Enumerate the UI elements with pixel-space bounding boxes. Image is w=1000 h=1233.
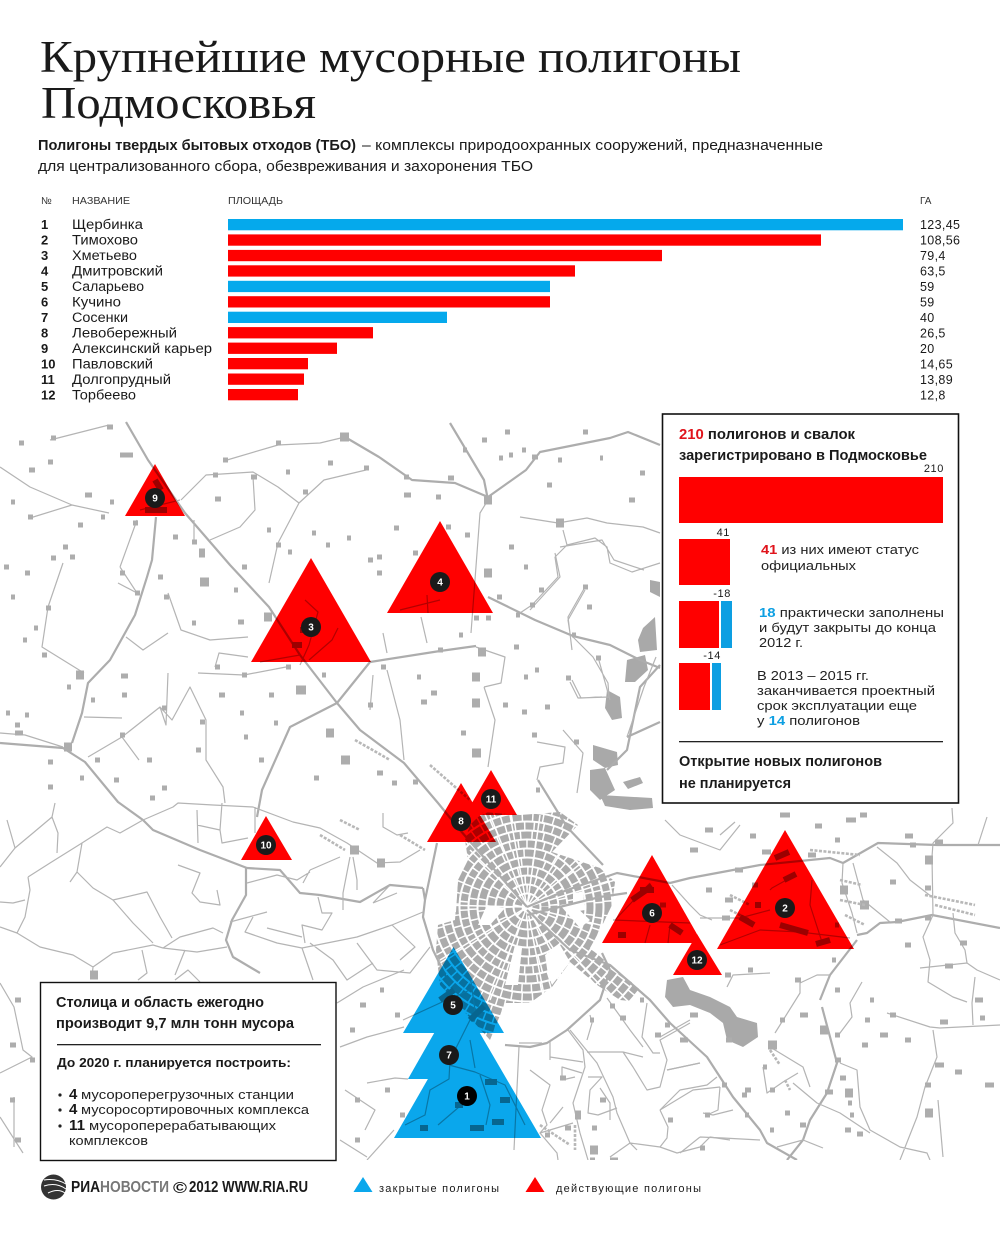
bar chart: landfill areas: 12	[41, 388, 55, 402]
bar chart: landfill areas: 3	[41, 248, 48, 263]
bar chart: landfill areas: Тимохово	[72, 232, 138, 248]
title	[40, 32, 741, 128]
bar chart: landfill areas: Сосенки	[72, 310, 128, 325]
bar 18	[679, 588, 732, 648]
bar chart: landfill areas: 10	[41, 356, 55, 372]
bar chart: landfill areas: 1	[41, 217, 48, 232]
triangle 3	[251, 558, 371, 662]
note 14	[757, 669, 935, 728]
number badges: 8	[458, 816, 464, 828]
number badges: 9	[152, 494, 158, 504]
plan heading: До 2020 г. планируется построить:	[57, 1055, 291, 1070]
table header: ПЛОЩАДЬ	[228, 196, 283, 207]
bar 41: 41	[717, 527, 730, 539]
note 14: В 2013 – 2015 гг.	[757, 669, 869, 683]
minor roads	[0, 425, 1000, 1160]
number badges: 4	[437, 578, 443, 588]
bar chart: landfill areas: Левобережный	[72, 326, 177, 340]
bar chart: landfill areas: 4	[41, 264, 49, 278]
bar 41	[679, 527, 730, 585]
triangle 9	[125, 464, 185, 516]
note 41: 41 из них имеют статус	[761, 543, 919, 557]
note 14: у 14 полигонов	[757, 714, 860, 728]
triangles 5, 7 and 1	[394, 947, 541, 1138]
legend: active landfills: действующие полигоны	[556, 1183, 701, 1195]
number badges: 3	[308, 622, 314, 634]
bar chart: landfill areas: 14,65	[920, 358, 953, 372]
triangle 6	[602, 855, 702, 943]
logo: RIA Novosti	[41, 1174, 308, 1200]
intro text: Полигоны твердых бытовых отходов (ТБО)	[38, 137, 356, 154]
panel: registered landfills	[662, 414, 958, 803]
title: Крупнейшие мусорные полигоны	[40, 32, 741, 82]
panel heading: Столица и область ежегодно	[56, 995, 264, 1011]
major roads	[0, 422, 1000, 1160]
bar chart: landfill areas: 9	[41, 341, 48, 356]
table header	[41, 196, 932, 207]
note 14: заканчивается проектный	[757, 684, 935, 698]
plan list: мусоросортировочных комплекса	[81, 1103, 309, 1117]
table header: НАЗВАНИЕ	[72, 196, 130, 207]
bar chart: landfill areas: 11	[41, 372, 55, 387]
bar chart: landfill areas: 108,56	[920, 234, 960, 248]
bar chart: landfill areas: 6	[41, 294, 48, 310]
bar chart: landfill areas: 59	[920, 296, 935, 310]
number badges: 6	[649, 908, 655, 920]
bar chart: landfill areas: Долгопрудный	[72, 372, 171, 387]
panel heading: производит 9,7 млн тонн мусора	[56, 1016, 295, 1032]
built-up areas beneath triangles	[145, 480, 830, 1128]
legend: active landfills	[526, 1177, 701, 1195]
bar chart: landfill areas: 59	[920, 280, 935, 294]
bar chart: landfill areas: 8	[41, 326, 48, 340]
triangles: landfills on the map	[125, 464, 854, 1138]
note 18	[759, 606, 944, 650]
bar chart: landfill areas: Саларьево	[72, 279, 144, 294]
bar 210	[679, 463, 944, 523]
villages	[4, 427, 994, 1165]
logo: RIA Novosti: 2012 WWW.RIA.RU	[189, 1179, 308, 1196]
bar chart: landfill areas: Торбеево	[72, 388, 136, 402]
bar chart: landfill areas: Хметьево	[72, 248, 137, 263]
bar chart: landfill areas: 63,5	[920, 264, 946, 278]
intro text: – комплексы природоохранных сооружений, предназначенные	[362, 137, 823, 154]
bar 18: -18	[713, 588, 731, 600]
legend: closed landfills: закрытые полигоны	[379, 1183, 499, 1195]
bar chart: landfill areas: 12,8	[920, 388, 946, 402]
plan list: 11	[69, 1117, 85, 1134]
bar chart: landfill areas: 79,4	[920, 249, 946, 263]
triangle 2	[717, 830, 854, 949]
bar chart: landfill areas: Алексинский карьер	[72, 341, 212, 356]
triangle 11	[465, 770, 517, 815]
number badges: 7	[446, 1050, 452, 1062]
bar 210: 210	[924, 463, 944, 475]
panel conclusion	[679, 754, 882, 792]
number badges: 12	[691, 956, 703, 966]
panel heading	[56, 995, 295, 1032]
note 41: официальных	[761, 559, 857, 573]
plan list	[58, 1086, 309, 1148]
logo: RIA Novosti: ©	[173, 1180, 187, 1197]
logo: RIA Novosti: РИАНОВОСТИ	[71, 1179, 169, 1196]
bar chart: landfill areas: Кучино	[72, 294, 121, 310]
number badges	[145, 488, 795, 1106]
intro text	[38, 137, 823, 175]
bar 14: -14	[703, 650, 721, 662]
bar chart: landfill areas: 5	[41, 279, 48, 294]
panel conclusion: Открытие новых полигонов	[679, 754, 882, 770]
bar 14	[679, 650, 721, 710]
plan list: комплексов	[69, 1134, 148, 1148]
number badges: 2	[782, 904, 788, 914]
bar chart: landfill areas: 26,5	[920, 326, 946, 340]
bar chart: landfill areas: 40	[920, 311, 935, 325]
bar chart: landfill areas: 7	[41, 310, 48, 325]
bar chart: landfill areas: 13,89	[920, 373, 953, 387]
note 18: и будут закрыты до конца	[759, 621, 936, 635]
bar chart: landfill areas: 20	[920, 342, 935, 356]
bar chart: landfill areas: 2	[41, 232, 48, 248]
number badges: 5	[450, 1000, 456, 1012]
plan list: мусороперерабатывающих	[89, 1119, 277, 1133]
map of Moscow region	[0, 422, 1000, 1165]
number badges: 1	[464, 1092, 470, 1102]
note 14: срок эксплуатации еще	[757, 699, 917, 713]
note 18: 18 практически заполнены	[759, 606, 944, 620]
bar chart: landfill areas: 123,45	[920, 218, 960, 232]
triangle 12	[673, 934, 722, 975]
bar chart: landfill areas: Павловский	[72, 356, 153, 372]
plan list: 4	[69, 1086, 78, 1103]
triangle 4	[387, 521, 493, 613]
title: Подмосковья	[41, 78, 316, 128]
intro text: для централизованного сбора, обезвреживания и захоронения ТБО	[38, 158, 533, 175]
triangle 10	[241, 816, 292, 860]
panel: annual waste and plans	[40, 982, 336, 1160]
bar chart: landfill areas: Щербинка	[72, 217, 144, 232]
table header: ГА	[920, 196, 932, 207]
legend: closed landfills	[354, 1177, 499, 1195]
note 18: 2012 г.	[759, 636, 803, 650]
panel: registered landfills: зарегистрировано в Подмосковье	[679, 448, 927, 464]
bar chart: landfill areas	[41, 217, 960, 402]
number badges: 10	[260, 840, 272, 852]
table header: №	[41, 196, 52, 207]
panel conclusion: не планируется	[679, 776, 791, 792]
plan list: мусороперегрузочных станции	[81, 1088, 294, 1102]
triangle 8	[427, 783, 496, 842]
bar chart: landfill areas: Дмитровский	[72, 264, 163, 278]
plan list: 4	[69, 1101, 78, 1118]
note 41	[761, 543, 919, 573]
panel heading: 210 полигонов и свалок	[679, 427, 856, 443]
number badges: 11	[486, 794, 497, 806]
